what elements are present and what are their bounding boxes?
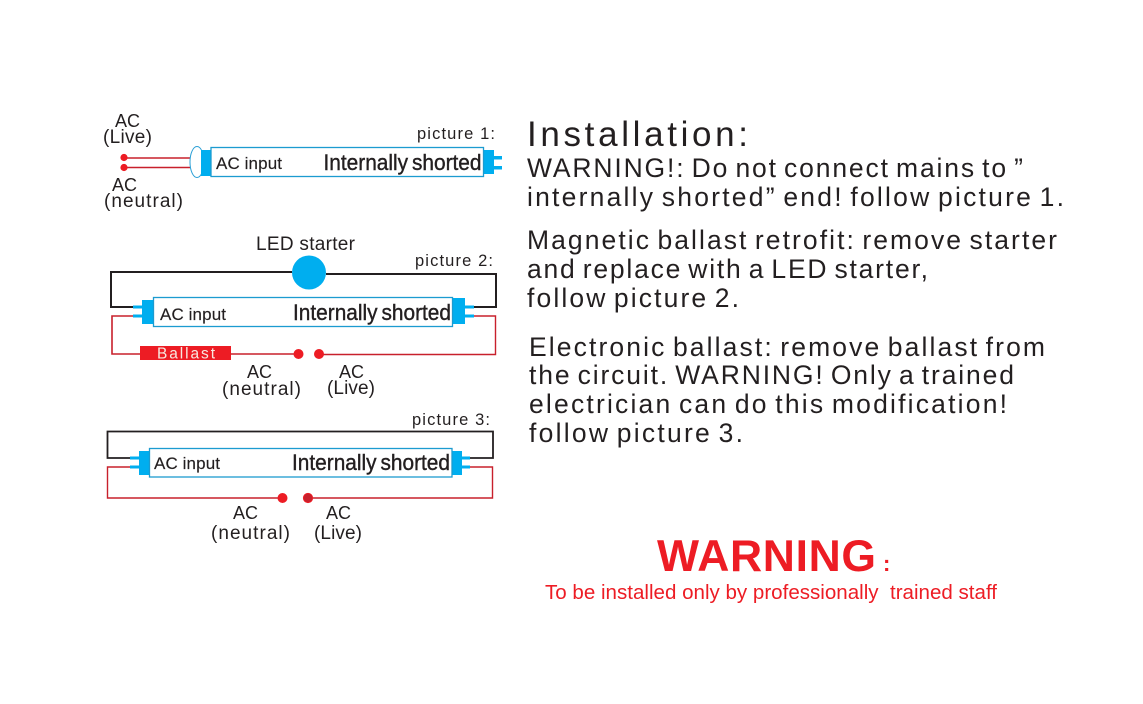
label: AC live: AC <box>326 503 351 523</box>
black wire loop <box>111 272 292 307</box>
text block: magnetic ballast: follow picture 2. <box>527 283 739 313</box>
label: AC live <box>327 362 375 399</box>
tube: Internally shorted <box>293 300 451 325</box>
label: AC neutral: AC <box>233 503 258 523</box>
text block: electronic ballast: electrician can do this modification! <box>529 389 1007 419</box>
text block: mains warning <box>527 153 1064 212</box>
tube: Internally shorted <box>292 450 450 475</box>
label: AC neutral <box>104 175 183 212</box>
label: AC live: AC <box>339 362 364 382</box>
label: AC neutral <box>222 362 301 400</box>
ballast: Ballast <box>157 346 216 362</box>
tube <box>133 298 474 326</box>
label: AC neutral: AC <box>247 362 272 382</box>
black wire right <box>326 274 496 307</box>
text block: magnetic ballast: Magnetic ballast retrofit: remove starter <box>527 225 1057 255</box>
ballast <box>140 346 231 362</box>
heading: Installation: Installation: <box>527 115 748 154</box>
diagram: picture 2 <box>111 234 496 400</box>
icon: LED starter <box>292 256 326 290</box>
label: AC live <box>103 111 152 148</box>
label: picture 3: picture 3: <box>412 411 490 429</box>
label: AC neutral: (neutral) <box>222 379 301 400</box>
label: AC neutral: (neutral) <box>104 191 183 212</box>
text block: mains warning: WARNING!: Do not connect mains to ” <box>527 153 1023 183</box>
tube: AC input <box>216 154 282 173</box>
tube <box>190 146 502 178</box>
label: AC live: (Live) <box>327 378 375 399</box>
label: picture 1: picture 1: <box>417 125 495 143</box>
tube: AC input <box>160 305 226 324</box>
label: picture 2: picture 2: <box>415 252 493 270</box>
label: AC neutral: AC <box>112 175 137 195</box>
label: AC live: (Live) <box>103 127 152 148</box>
label: AC live: (Live) <box>314 523 362 544</box>
red wire loop <box>108 467 492 498</box>
tube: AC input <box>154 454 220 473</box>
label: AC live <box>314 503 362 544</box>
text block: magnetic ballast <box>527 225 1057 313</box>
label: AC live: AC <box>115 111 140 131</box>
text block: electronic ballast: Electronic ballast: remove ballast from <box>529 332 1045 362</box>
text block: magnetic ballast: and replace with a LED starter, <box>527 254 928 284</box>
text block: electronic ballast: the circuit. WARNING! Only a trained <box>529 360 1014 390</box>
tube <box>130 448 470 477</box>
diagram: picture 3 <box>108 411 493 544</box>
red wire loop <box>112 316 496 354</box>
terminals <box>294 349 324 359</box>
black wire loop <box>108 432 493 458</box>
warning colon: : <box>883 551 890 576</box>
text block: electronic ballast <box>529 332 1045 448</box>
label: LED starter: LED starter <box>256 234 356 255</box>
text block: electronic ballast: follow picture 3. <box>529 418 743 448</box>
warning heading: WARNING <box>657 532 876 581</box>
warning subtext: To be installed only by professionally trained staff <box>545 582 997 604</box>
callout: warning <box>545 532 997 604</box>
label: AC neutral <box>211 503 290 544</box>
wires and terminals <box>120 154 191 171</box>
terminals <box>278 493 313 503</box>
label: AC neutral: (neutral) <box>211 523 290 544</box>
diagram: picture 1 <box>103 111 502 212</box>
text block: mains warning: internally shorted” end! follow picture 1. <box>527 182 1064 212</box>
tube: Internally shorted <box>324 150 482 175</box>
